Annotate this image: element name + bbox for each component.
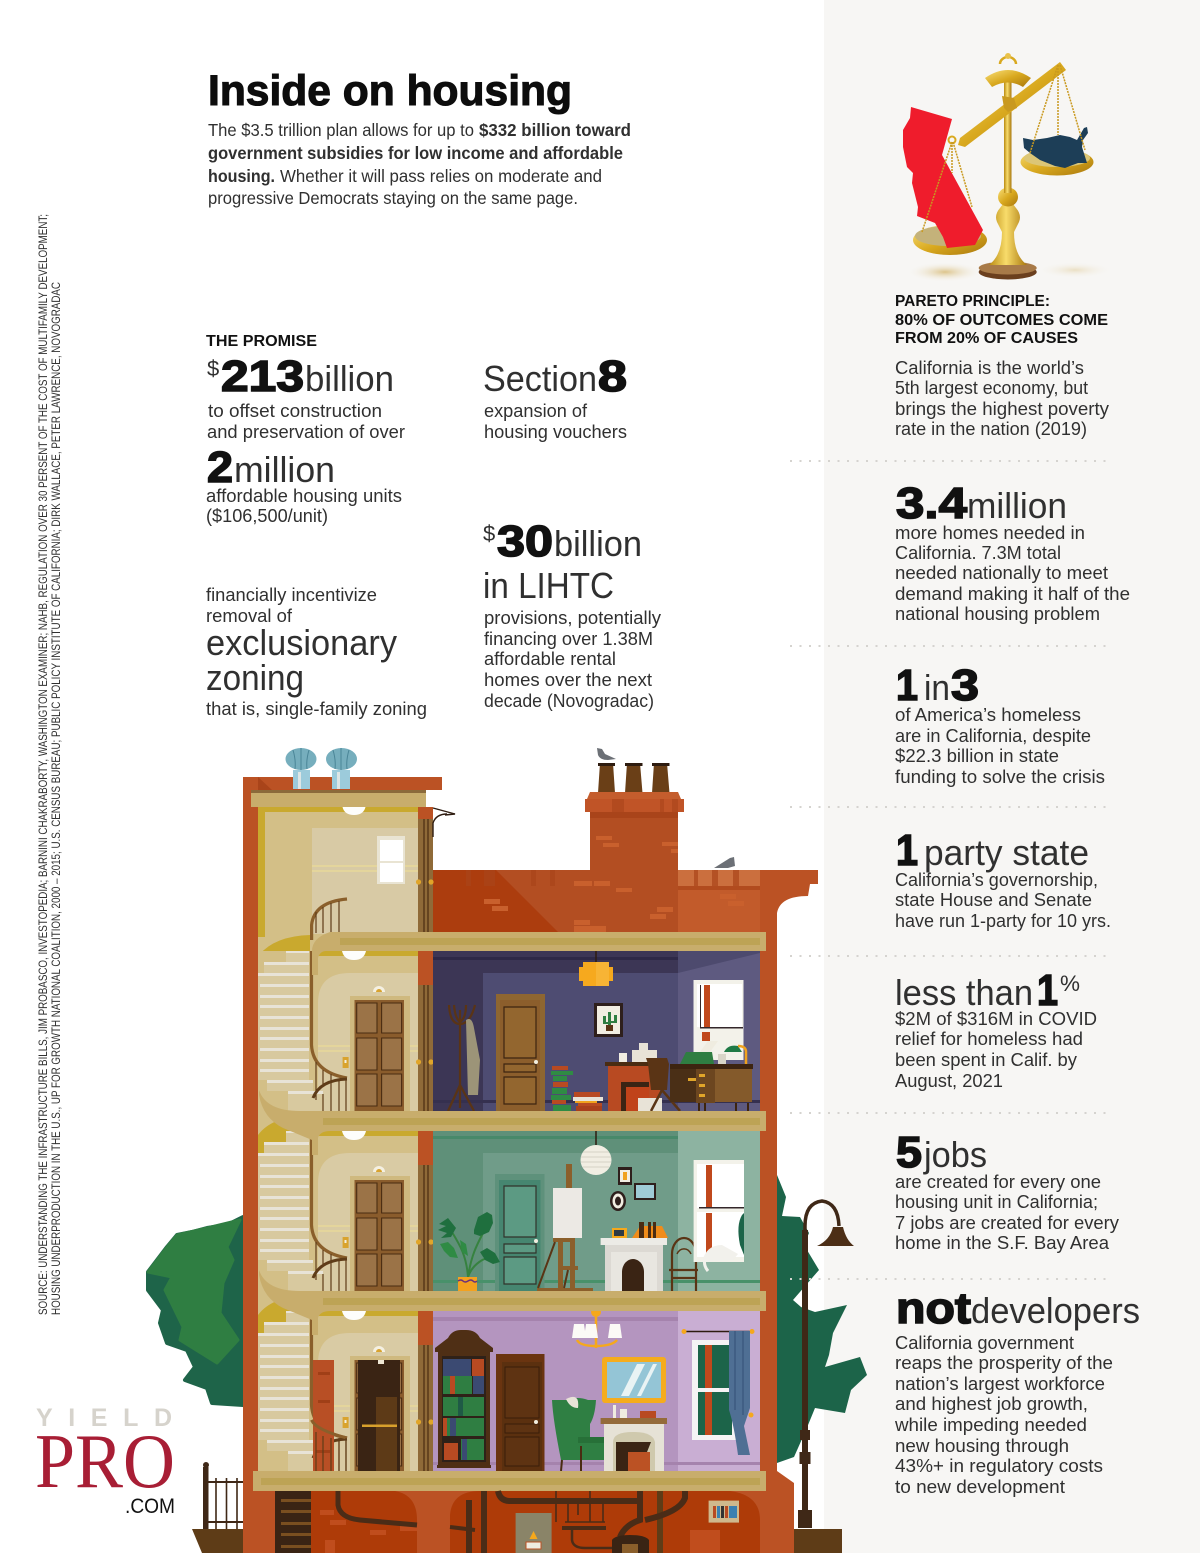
sidebar: Pareto principle: brings the highest poverty (895, 399, 1109, 419)
stove (612, 1535, 649, 1553)
white fireplace with mantel objects (601, 1222, 668, 1291)
stat: exclusionary zoning (206, 585, 427, 719)
sidebar: Pareto principle: California is the world’s (895, 358, 1084, 378)
sidebar: Pareto principle (895, 293, 1109, 439)
sidebar stat: 5 jobs: 7 jobs are created for every (895, 1213, 1119, 1233)
section: the promise, left column (206, 333, 427, 719)
bookcase (435, 1330, 493, 1468)
sidebar stat: 1 in 3: are in California, despite (895, 726, 1091, 746)
sidebar stat: 5 jobs: are created for every one (895, 1172, 1101, 1192)
basement (275, 1491, 760, 1553)
sidebar stat: 1 party state: have run 1-party for 10 yrs. (895, 911, 1111, 931)
sidebar stat: 1 in 3: of America’s homeless (895, 705, 1081, 725)
electrical box (516, 1513, 552, 1553)
title: Inside on housing (208, 67, 572, 115)
room: green studio, floor 2 (433, 1131, 760, 1291)
sidebar stat: less than 1%: relief for homeless had (895, 1029, 1083, 1049)
logo: Yield Pro: PRO (35, 1418, 175, 1504)
sidebar: Pareto principle: rate in the nation (2019) (895, 419, 1087, 439)
pigeons (597, 748, 735, 868)
sidebar stat: 1 party state: party state (924, 832, 1089, 873)
chandelier (572, 1307, 622, 1348)
sidebar stat: less than 1%: been spent in Calif. by (895, 1050, 1077, 1070)
sidebar stat: 1 in 3 (895, 661, 1105, 787)
scales illustration (903, 53, 1113, 282)
stat: 2 million (206, 443, 402, 526)
door (496, 1354, 544, 1471)
pendant lamp (579, 951, 613, 986)
stat: $30 billion in LIHTC: homes over the next (484, 670, 652, 690)
sidebar stat: less than 1% (895, 966, 1097, 1091)
right pan with USA map (1020, 65, 1094, 176)
sidebar stat: not developers: developers (971, 1290, 1140, 1331)
source credit, vertical: SOURCE: UNDERSTANDING THE INFRASTRUCTURE BILLS, JIM PROBASCO, INVESTOPEDIA; BARNINI CHAKRABORTY, WASHINGTON EXAMINER; NAHB, REGULATION OVER 30 PERSENT OF THE COST OF MULTIFAMILY DEVELOPMENT; (38, 214, 50, 1315)
intro text block (208, 120, 631, 208)
sidebar stat: 1 in 3: 3 (951, 661, 979, 710)
stat: Section 8: expansion of (484, 401, 588, 421)
sidebar stat: not developers: California government (895, 1333, 1074, 1353)
intro text block: government subsidies for low income and affordable (208, 143, 623, 163)
sidebar stat: less than 1%: less than (895, 972, 1033, 1013)
ground floor elevator door and brick niche (312, 1360, 400, 1471)
stat: $30 billion in LIHTC (483, 517, 661, 711)
stair wall backing (258, 807, 418, 1472)
panel: right sidebar background (824, 0, 1200, 1553)
shadows (907, 262, 1113, 282)
wall vent (709, 1501, 739, 1523)
sidebar stat: 5 jobs: 5 (896, 1128, 922, 1177)
sidebar stat: not developers: 43%+ in regulatory costs (895, 1456, 1103, 1476)
stat: $30 billion in LIHTC: financing over 1.38M (484, 629, 653, 649)
coat rack (448, 1005, 480, 1111)
chimney (585, 763, 684, 872)
left tree (148, 1217, 243, 1405)
left pan with California map (903, 107, 987, 255)
sidebar stat: not developers: while impeding needed (894, 1415, 1087, 1435)
section: the promise, right column (483, 352, 661, 711)
sidebar stat: not developers: and highest job growth, (895, 1394, 1088, 1414)
roof wall (433, 870, 818, 932)
room: blue study, floor 1 (433, 951, 760, 1111)
stat: exclusionary zoning: financially incentivize (206, 585, 377, 605)
stat: Section 8 (483, 352, 627, 442)
sidebar stat: 1 party state: 1 (896, 826, 918, 875)
sidebar stat: 3.4 million: California. 7.3M total (895, 543, 1061, 563)
sidebar stat: 1 in 3: in (924, 667, 950, 708)
sidebar stat: 1 party state: state House and Senate (895, 890, 1092, 910)
wood mantel fireplace (601, 1405, 667, 1471)
sidebar stat: 3.4 million: more homes needed in (895, 523, 1085, 543)
room: purple parlor, ground floor (433, 1307, 760, 1471)
stat: $30 billion in LIHTC: affordable rental (484, 649, 616, 669)
writing desk and chair (605, 1043, 680, 1111)
sidebar stat: 5 jobs: home in the S.F. Bay Area (895, 1233, 1110, 1253)
sidebar stat: 3.4 million: million (967, 485, 1067, 526)
source credit, vertical: HOUSING UNDERPRODUCTION IN THE U.S., UP FOR GROWTH NATIONAL COALITION, 2000 – 2015; U.S. CENSUS BUREAU; PUBLIC POLICY INSTITUTE OF CALIFORNIA; DIRK WALLACE, PETER LAWRENCE, NOVOGRADAC (51, 282, 63, 1315)
fence (192, 1462, 243, 1553)
logo: Yield Pro: .COM (125, 1495, 175, 1518)
stat: exclusionary zoning: exclusionary (206, 622, 397, 663)
stat: $30 billion in LIHTC: decade (Novogradac) (484, 691, 654, 711)
sidebar: Pareto principle: 80% OF OUTCOMES COME (895, 312, 1108, 329)
stat: Section 8: 8 (598, 352, 627, 401)
sidebar stat: 3.4 million (895, 479, 1130, 624)
green armchair (552, 1397, 612, 1471)
sidebar stat: not developers: nation’s largest workforce (895, 1374, 1105, 1394)
window (694, 980, 744, 1060)
intro text block: Whether it will pass relies on moderate and (280, 166, 602, 186)
stat: $30 billion in LIHTC: $ (483, 521, 495, 546)
sidebar stat: less than 1%: $2M of $316M in COVID (895, 1009, 1097, 1029)
stat: Section 8: Section (483, 358, 597, 399)
sidebar: Pareto principle: 5th largest economy, but (895, 378, 1088, 398)
stat: $213 billion: and preservation of over (207, 422, 405, 442)
sidebar stat: 5 jobs: housing unit in California; (895, 1192, 1098, 1212)
pipes (338, 1491, 685, 1553)
sidebar: Pareto principle: FROM 20% OF CAUSES (895, 330, 1078, 347)
sidebar stat: less than 1%: August, 2021 (895, 1071, 1003, 1091)
sidebar stat: 1 party state (895, 826, 1111, 931)
roof vents (286, 748, 357, 789)
sidebar stat: 1 in 3: 1 (896, 661, 918, 710)
intro text block: The $3.5 trillion plan allows for up to (208, 120, 474, 140)
stat: $213 billion: billion (305, 358, 394, 399)
stat: Section 8: housing vouchers (484, 422, 627, 442)
sidebar stat: 5 jobs (895, 1128, 1119, 1253)
potted plant (438, 1212, 500, 1291)
outer brick walls (243, 777, 794, 1553)
door (496, 994, 545, 1111)
cactus picture (594, 1003, 623, 1037)
stat: $213 billion: 213 (221, 352, 304, 401)
door (495, 1174, 544, 1291)
stat: $30 billion in LIHTC: in LIHTC (483, 565, 614, 606)
sidebar stat: 1 party state: California’s governorship, (895, 870, 1098, 890)
bentwood chair (669, 1238, 698, 1291)
stat: exclusionary zoning: that is, single-family zoning (206, 699, 427, 719)
stair halls, floors 1 to 3 (258, 951, 434, 1471)
stat: $213 billion (207, 352, 405, 442)
sidebar stat: not developers: to new development (895, 1477, 1065, 1497)
paper globe lamp (580, 1131, 612, 1175)
base and stem (979, 53, 1037, 280)
stat: 2 million: 2 (207, 443, 233, 492)
book stacks (551, 1066, 603, 1111)
stat: $30 billion in LIHTC: 30 (497, 517, 553, 566)
office desk with typewriter and lamp (670, 1041, 753, 1111)
gilded mirror (602, 1357, 666, 1403)
stat: exclusionary zoning: removal of (206, 606, 293, 626)
sidebar stat: 3.4 million: needed nationally to meet (895, 563, 1108, 583)
basement stairs (275, 1491, 311, 1553)
sidebar stat: less than 1%: % (1060, 971, 1080, 996)
stat: $213 billion: $ (207, 356, 219, 381)
sidebar stat: 1 in 3: funding to solve the crisis (895, 767, 1105, 787)
easel and canvas (537, 1164, 593, 1291)
logo: Yield Pro: YIELD (36, 1404, 172, 1432)
intro text block: progressive Democrats staying on the same page. (208, 188, 578, 208)
window with curtain (682, 1329, 754, 1455)
heading: THE PROMISE (206, 333, 317, 350)
beam (948, 62, 1066, 147)
sidebar stat: not developers: new housing through (895, 1436, 1069, 1456)
stat: $30 billion in LIHTC: billion (554, 523, 642, 564)
intro text block: housing. (208, 166, 275, 186)
framed pictures (610, 1167, 656, 1211)
stat: exclusionary zoning: zoning (206, 657, 304, 698)
dotted dividers (790, 461, 1110, 1279)
sidebar stat: 1 in 3: $22.3 billion in state (895, 746, 1059, 766)
stat: $213 billion: to offset construction (208, 401, 382, 421)
lamp post (794, 1201, 854, 1553)
right tree (777, 1175, 867, 1463)
sidebar stat: not developers: not (896, 1284, 971, 1333)
stat: 2 million: million (234, 449, 335, 490)
top floor stair hall (258, 807, 455, 973)
sidebar stat: 3.4 million: 3.4 (896, 479, 968, 528)
intro text block: $332 billion toward (479, 120, 631, 140)
floor slabs and cornice (251, 790, 766, 1491)
sidebar stat: not developers (894, 1284, 1140, 1497)
house (243, 748, 818, 1553)
sidebar stat: 3.4 million: demand making it half of the (895, 584, 1130, 604)
source credit, vertical (38, 214, 63, 1315)
sidebar: Pareto principle: PARETO PRINCIPLE: (895, 293, 1050, 310)
sidebar stat: less than 1%: 1 (1037, 966, 1058, 1015)
window with white cat (694, 1160, 744, 1271)
sidebar stat: 5 jobs: jobs (923, 1134, 987, 1175)
stat: 2 million: ($106,500/unit) (206, 506, 328, 526)
stat: 2 million: affordable housing units (206, 486, 402, 506)
stat: $30 billion in LIHTC: provisions, potentially (484, 608, 661, 628)
sidebar stat: not developers: reaps the prosperity of the (895, 1353, 1113, 1373)
sidebar stat: 3.4 million: national housing problem (895, 604, 1100, 624)
